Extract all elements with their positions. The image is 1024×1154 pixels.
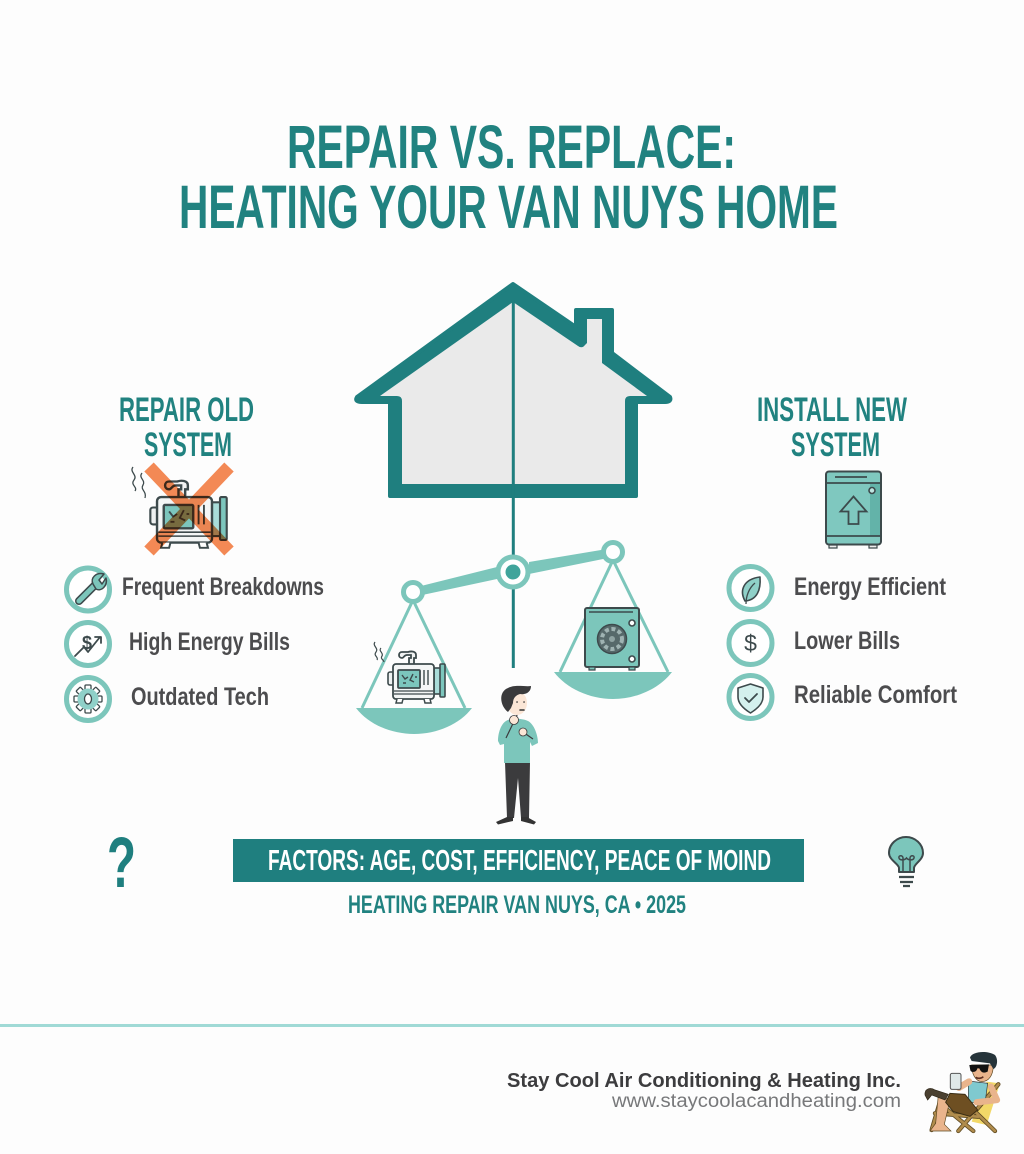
head and hand bbox=[507, 691, 527, 715]
item: lower bills: $ bbox=[744, 630, 757, 656]
company mascot bbox=[925, 1052, 1000, 1131]
right pan bbox=[554, 672, 672, 699]
item: reliable comfort: Reliable Comfort bbox=[794, 681, 958, 709]
legs bbox=[505, 762, 530, 818]
item: high energy bills bbox=[66, 622, 290, 666]
right scale strings bbox=[560, 560, 668, 672]
title bbox=[179, 113, 838, 241]
banner: factors: FACTORS: AGE, COST, EFFICIENCY, PEACE OF MOIND bbox=[268, 845, 771, 877]
feet bbox=[496, 817, 536, 824]
house illustration bbox=[356, 284, 670, 496]
icon: old furnace on left pan bbox=[374, 642, 445, 703]
balance scale bbox=[356, 300, 672, 734]
item: frequent breakdowns bbox=[66, 568, 324, 611]
panel: repair old system bbox=[66, 391, 324, 720]
panel: install new system bbox=[729, 391, 958, 718]
company name: Stay Cool Air Conditioning & Heating Inc. bbox=[507, 1070, 901, 1092]
subtitle: location and year: HEATING REPAIR VAN NUYS, CA • 2025 bbox=[348, 891, 686, 919]
item: energy efficient bbox=[729, 566, 947, 610]
item: lower bills: Lower Bills bbox=[794, 627, 900, 655]
scale beam bbox=[413, 548, 613, 597]
item: high energy bills: $ bbox=[82, 633, 92, 653]
item: reliable comfort bbox=[729, 676, 958, 718]
left pan bbox=[356, 708, 472, 734]
heading: install new system: INSTALL NEW bbox=[757, 391, 908, 429]
heading: install new system: SYSTEM bbox=[791, 426, 880, 464]
icon: crossed out old furnace bbox=[132, 467, 229, 551]
footer bbox=[0, 1024, 1024, 1131]
item: frequent breakdowns: Frequent Breakdowns bbox=[122, 573, 324, 601]
left pivot ring bbox=[404, 582, 422, 602]
icon: question mark: ? bbox=[107, 824, 136, 903]
left scale strings bbox=[362, 600, 465, 708]
right pivot ring bbox=[604, 542, 622, 562]
company website: www.staycoolacandheating.com bbox=[611, 1091, 901, 1112]
center pivot bbox=[498, 557, 528, 587]
icon: new furnace on right pan bbox=[585, 608, 639, 670]
heading: install new system bbox=[757, 391, 908, 464]
icon: light bulb bbox=[889, 837, 923, 886]
heading: repair old system: SYSTEM bbox=[144, 426, 232, 464]
item: outdated tech: Outdated Tech bbox=[131, 683, 269, 711]
torso and arms bbox=[498, 719, 538, 763]
title: REPAIR VS. REPLACE: bbox=[287, 113, 736, 181]
scale center post bbox=[512, 300, 515, 668]
icon: new furnace with up arrow bbox=[826, 472, 881, 548]
heading: repair old system bbox=[119, 391, 254, 464]
heading: repair old system: REPAIR OLD bbox=[119, 391, 254, 429]
item: high energy bills: High Energy Bills bbox=[129, 628, 290, 656]
banner: factors bbox=[233, 839, 804, 882]
footer divider bbox=[0, 1024, 1024, 1027]
thinking person bbox=[496, 686, 538, 824]
item: lower bills bbox=[729, 622, 900, 664]
item: energy efficient: Energy Efficient bbox=[794, 573, 947, 601]
item: outdated tech bbox=[66, 678, 269, 720]
